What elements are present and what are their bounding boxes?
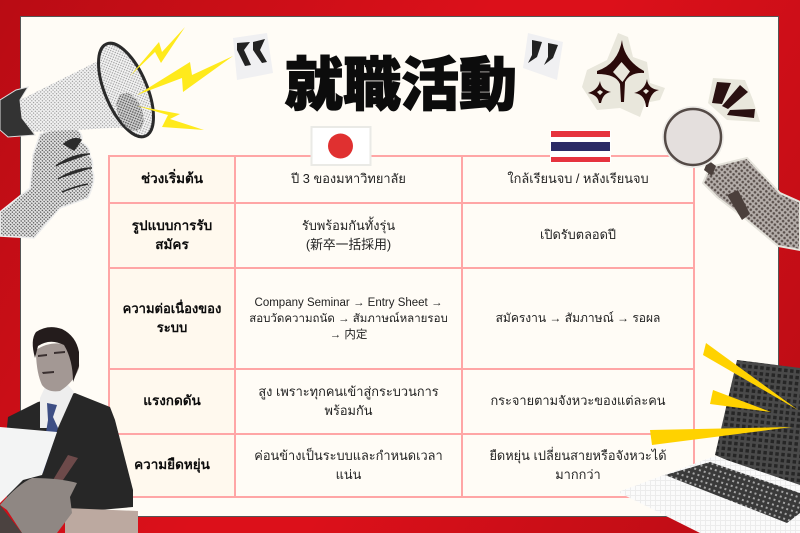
- Japan: system continuity: → 内定: [330, 328, 367, 340]
- hand: [0, 129, 94, 238]
- Thailand: pressure: [461, 368, 695, 435]
- Thailand: system continuity: [461, 267, 695, 370]
- Japan: flexibility: [234, 433, 463, 498]
- Japan: pressure: [234, 368, 463, 435]
- interviewer sleeve: [0, 505, 22, 533]
- row label: application format: สมัคร: [155, 236, 189, 252]
- Japan: application format: [234, 202, 463, 269]
- yellow rays: [650, 343, 798, 445]
- interviewer hand: [0, 478, 77, 533]
- closing quote mark: [523, 33, 563, 80]
- desk: [65, 508, 138, 533]
- necktie: [40, 403, 58, 473]
- laptop keyboard: [665, 462, 800, 523]
- Japan: system continuity: สอบวัดความถนัด → สัมภาษณ์หลายรอบ: [249, 312, 448, 324]
- Japan: start period: [234, 155, 463, 204]
- large sparkle: [597, 40, 644, 102]
- Japan: application format: รับพร้อมกันทั้งรุ่น: [302, 218, 395, 233]
- magnifying glass handle: [704, 160, 716, 176]
- laptop screen: [715, 360, 800, 492]
- forearm and hand: [703, 158, 800, 250]
- Japan: start period: ปี 3 ของมหาวิทยาลัย: [291, 171, 406, 186]
- Thailand: pressure: กระจายตามจังหวะของแต่ละคน: [490, 393, 666, 408]
- row label: application format: รูปแบบการรับ: [132, 218, 212, 233]
- Thailand: system continuity: สมัครงาน → สัมภาษณ์ → รอผล: [496, 311, 660, 325]
- lightning bolts: [130, 27, 233, 130]
- Thailand: flexibility: [461, 433, 695, 498]
- Japan: pressure: สูง เพราะทุกคนเข้าสู่กระบวนการ: [258, 384, 439, 399]
- Japan: system continuity: Company Seminar → Entry Sheet →: [255, 296, 442, 308]
- neck and shirt: [40, 385, 74, 428]
- title: 就職活動: [285, 38, 517, 122]
- Thailand: flexibility: มากกว่า: [555, 466, 601, 482]
- Japan: flexibility: ค่อนข้างเป็นระบบและกำหนดเวลา: [254, 448, 443, 463]
- hair: [33, 327, 79, 382]
- small right sparkle: [634, 79, 659, 107]
- row label: start period: ช่วงเริ่มต้น: [141, 171, 203, 186]
- Thailand: application format: เปิดรับตลอดปี: [540, 227, 616, 242]
- row label: pressure: แรงกดดัน: [143, 393, 201, 408]
- megaphone with hand: [0, 36, 165, 238]
- megaphone mouth: [87, 36, 165, 144]
- row label: start period: [108, 155, 236, 204]
- thumb shadow: [727, 190, 750, 220]
- resume paper: [0, 427, 57, 503]
- Japan: system continuity: [234, 267, 463, 370]
- Thailand: start period: ใกล้เรียนจบ / หลังเรียนจบ: [507, 171, 649, 186]
- opening quote mark: [233, 33, 273, 80]
- row label: flexibility: ความยืดหยุ่น: [134, 457, 210, 472]
- megaphone inner cone: [111, 89, 149, 135]
- row label: application format: [108, 202, 236, 269]
- Thailand: start period: [461, 155, 695, 204]
- Thailand: flexibility: ยืดหยุ่น เปลี่ยนสายหรือจังหวะได้: [489, 448, 667, 463]
- row label: system continuity: ระบบ: [157, 320, 187, 334]
- suit: [7, 393, 133, 512]
- small left sparkle: [588, 81, 611, 103]
- emphasis marks sticker: [708, 78, 760, 122]
- Japan flag: [312, 127, 370, 165]
- row label: pressure: [108, 368, 236, 435]
- Thailand: application format: [461, 202, 695, 269]
- row label: flexibility: [108, 433, 236, 498]
- Japan: pressure: พร้อมกัน: [325, 402, 372, 418]
- megaphone cone: [20, 60, 132, 132]
- laptop: [618, 360, 800, 533]
- sparkle sticker: [582, 33, 665, 117]
- Thailand flag: [550, 130, 611, 163]
- row label: system continuity: [108, 267, 236, 370]
- face: [36, 343, 79, 391]
- businessman photo: [0, 327, 138, 533]
- pen: [53, 455, 78, 480]
- Japan: application format: (新卒一括採用): [306, 236, 391, 252]
- Japan: flexibility: แน่น: [336, 466, 361, 482]
- comparison table: [108, 155, 695, 498]
- megaphone rear cap: [0, 87, 35, 137]
- eyes and mouth: [38, 351, 65, 374]
- row label: system continuity: ความต่อเนื่องของ: [123, 301, 221, 316]
- laptop base: [618, 456, 800, 533]
- hand knuckle shading: [56, 139, 92, 192]
- magnifying glass lens: [662, 106, 724, 168]
- hand with magnifying glass: [662, 106, 800, 250]
